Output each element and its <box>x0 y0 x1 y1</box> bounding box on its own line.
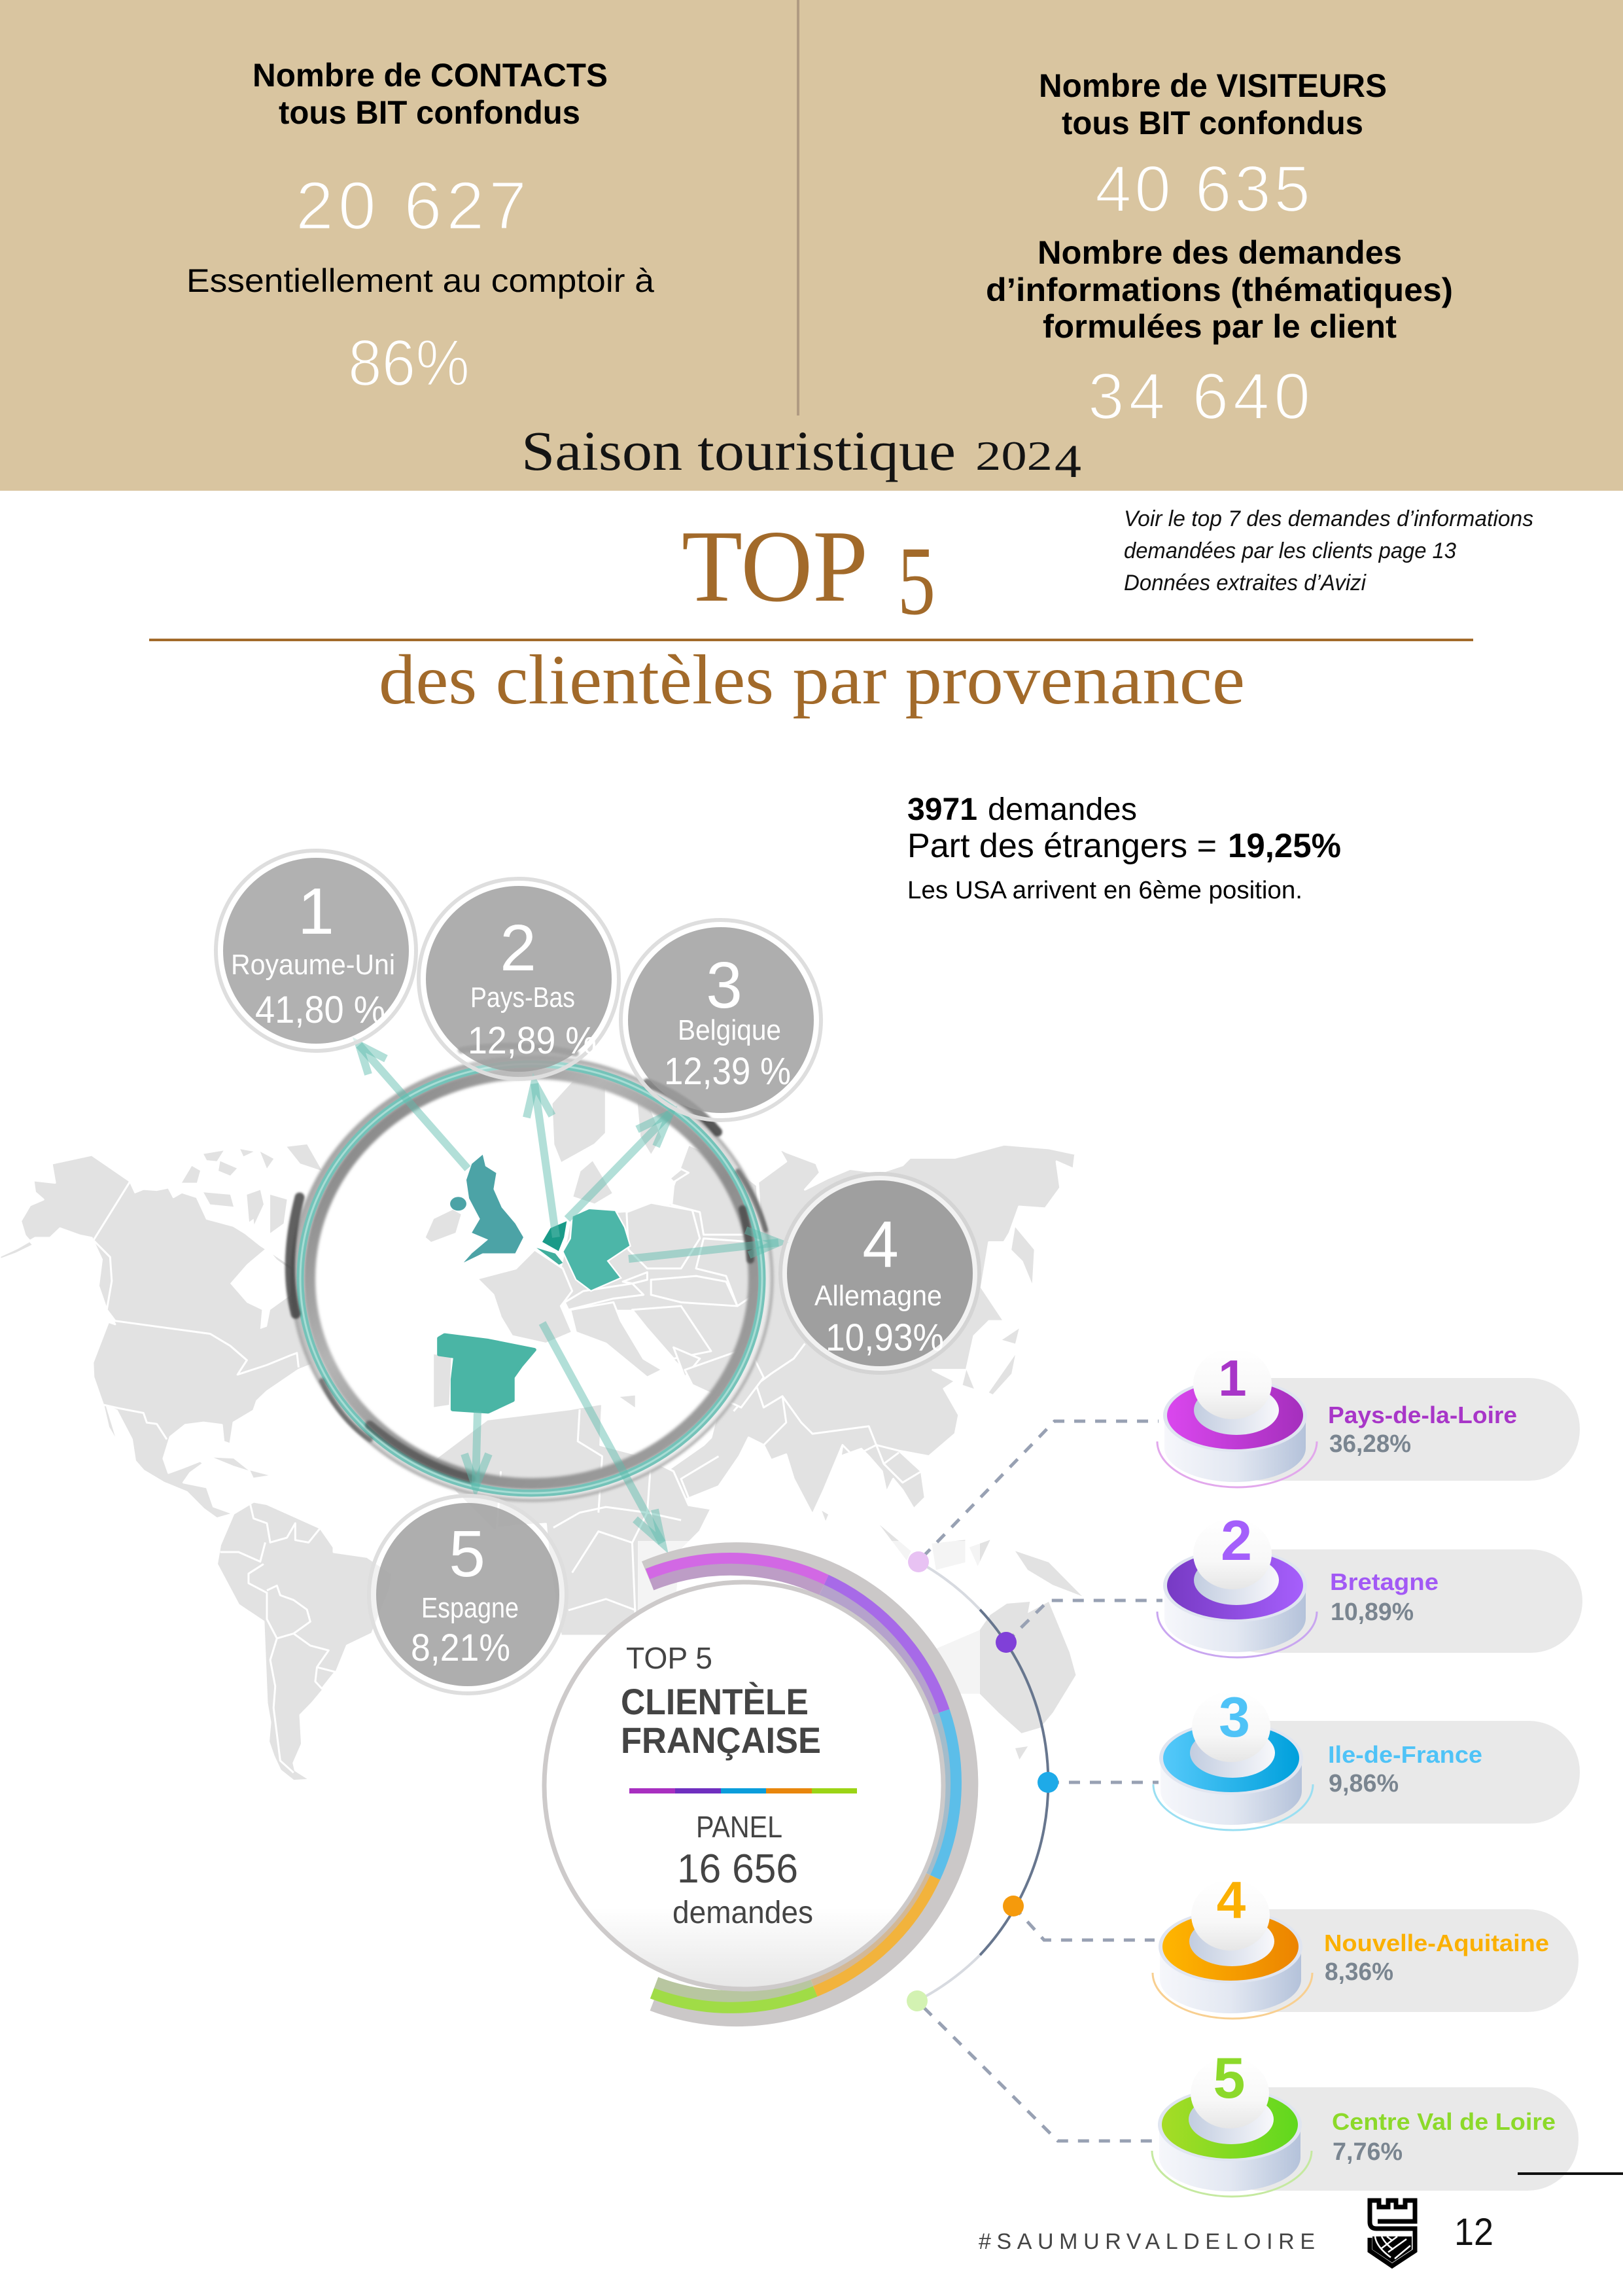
title: season: Saison touristique <box>521 419 956 482</box>
label: Bretagne <box>1330 1568 1439 1595</box>
value: 10,89% <box>1331 1598 1414 1626</box>
panel size <box>672 1810 813 1930</box>
title: top 5: TOP <box>682 509 868 623</box>
bubble 2: Pays-Bas <box>419 879 619 1079</box>
ring dark accents <box>290 1046 765 1479</box>
note: sources <box>1124 506 1533 595</box>
panel size: 16 656 <box>677 1846 798 1892</box>
heading: visitors: tous BIT confondus <box>1062 105 1363 141</box>
panel size: demandes <box>672 1896 813 1930</box>
arrow: Spain <box>464 1411 489 1487</box>
number: 3 <box>1219 1686 1250 1749</box>
pedestal <box>1152 2058 1312 2197</box>
panel: top 5 French clientele <box>544 1554 966 2015</box>
number: contacts: 20 627 <box>296 168 527 244</box>
hashtag: #SAUMURVALDELOIRE <box>979 2229 1315 2254</box>
number: 2 <box>1221 1510 1252 1572</box>
label: Centre Val de Loire <box>1332 2108 1556 2135</box>
coloured segments outer <box>648 1559 956 2007</box>
Europe <box>477 1077 763 1409</box>
label: Ile-de-France <box>1328 1741 1482 1768</box>
value: 7,76% <box>1333 2138 1403 2166</box>
title: season: 4 <box>1055 435 1081 487</box>
arrow: Germany <box>629 1230 778 1259</box>
bubble 2: Pays-Bas: Pays-Bas <box>470 981 575 1014</box>
timeline dots <box>907 1551 1058 2011</box>
dashed connectors <box>922 1421 1162 2141</box>
bubble 3: Belgique: 3 <box>706 949 742 1022</box>
text block: foreign share: 19,25% <box>1228 827 1341 865</box>
rank 5: Centre Val de Loire <box>1152 2045 1579 2197</box>
pill <box>1210 1549 1582 1653</box>
rank 2: Bretagne <box>1157 1510 1582 1657</box>
pedestal <box>1153 1691 1313 1830</box>
Spain <box>439 1335 534 1412</box>
arrow: Netherlands <box>527 1084 556 1237</box>
world map: Eurasia and Africa <box>428 1077 1075 1636</box>
panel heading: FRANÇAISE <box>621 1720 821 1761</box>
title rule <box>149 639 1473 641</box>
label: Pays-de-la-Loire <box>1328 1402 1517 1428</box>
icon: castle shield logo <box>1370 2200 1415 2266</box>
title: top 5: 5 <box>898 527 935 635</box>
text block: foreign share: Part des étrangers = <box>907 827 1217 865</box>
Netherlands <box>542 1221 567 1251</box>
arrow: France <box>542 1323 662 1543</box>
number: visitors: 40 635 <box>1095 152 1310 226</box>
bubble 1: Royaume-Uni: Royaume-Uni <box>231 949 395 981</box>
note: sources: Voir le top 7 des demandes d’informations <box>1124 506 1533 531</box>
pill <box>1210 1721 1580 1824</box>
title: season: 202 <box>975 433 1053 479</box>
text block: foreign share: 3971 <box>907 792 977 827</box>
arrow: United Kingdom <box>359 1045 468 1169</box>
text block: foreign share: Les USA arrivent en 6ème position. <box>907 877 1302 904</box>
panel: visitors and requests <box>986 67 1453 433</box>
heading: contacts: tous BIT confondus <box>279 94 580 131</box>
outer grey band <box>646 1554 966 2015</box>
number: requests: 34 640 <box>1088 360 1310 433</box>
United Kingdom <box>450 1155 523 1263</box>
top band background <box>0 0 1623 491</box>
heading: requests <box>986 234 1453 345</box>
note: sources: demandées par les clients page 13 <box>1124 539 1456 563</box>
value: 36,28% <box>1329 1430 1411 1458</box>
pedestal <box>1153 1880 1312 2019</box>
footer rule <box>1518 2172 1623 2175</box>
note: sources: Données extraites d’Avizi <box>1124 571 1367 595</box>
bubble 4: Allemagne: Allemagne <box>814 1280 942 1312</box>
value: 8,36% <box>1325 1958 1393 1986</box>
pill <box>1210 2087 1579 2191</box>
pill <box>1210 1909 1579 2012</box>
timeline arc <box>917 1562 1048 2001</box>
arrows: countries to bubbles <box>359 1045 778 1543</box>
colour bar <box>629 1788 857 1793</box>
heading: requests: d’informations (thématiques) <box>986 272 1453 308</box>
bubble 5: Espagne <box>369 1496 567 1693</box>
heading: visitors: Nombre de VISITEURS <box>1039 67 1387 104</box>
number: 1 <box>1218 1349 1247 1407</box>
value: 9,86% <box>1329 1770 1399 1797</box>
pedestal <box>1157 1349 1317 1487</box>
world map: Oceania <box>880 1525 1082 1759</box>
text: comptoir: Essentiellement au comptoir à <box>186 262 654 299</box>
Belgium <box>536 1248 563 1265</box>
bubble 4: Allemagne <box>780 1174 979 1373</box>
heading: visitors <box>1039 67 1387 141</box>
vertical divider <box>797 0 799 415</box>
label: Nouvelle-Aquitaine <box>1324 1930 1549 1956</box>
coloured segments inner <box>652 1570 945 1996</box>
rank 4: Nouvelle-Aquitaine <box>1153 1871 1579 2019</box>
arrow: Belgium <box>567 1114 670 1219</box>
white disc <box>544 1582 943 1989</box>
bubble 5: Espagne: Espagne <box>421 1592 519 1624</box>
number: 5 <box>1213 2045 1245 2110</box>
Asia <box>666 1144 1075 1528</box>
bubble 1: Royaume-Uni: 1 <box>298 875 334 948</box>
rank 1: Pays-de-la-Loire <box>1157 1349 1580 1487</box>
bubble 3: Belgique: Belgique <box>678 1014 781 1046</box>
bubble 2: Pays-Bas: 2 <box>500 911 536 985</box>
ring interior <box>306 1066 758 1491</box>
text block: foreign share <box>907 792 1341 904</box>
pill <box>1210 1378 1580 1481</box>
bubble 3: Belgique <box>621 920 821 1120</box>
number: comptoir share: 86% <box>348 327 470 400</box>
heading: contacts <box>253 57 608 131</box>
panel heading <box>621 1641 821 1761</box>
title: season <box>521 419 1081 487</box>
Africa <box>428 1404 711 1636</box>
panel: contacts <box>186 57 654 400</box>
white veil behind French panel <box>638 1541 980 2028</box>
bubble 5: Espagne: 8,21% <box>411 1627 510 1669</box>
heading: requests: formulées par le client <box>1043 308 1397 345</box>
panel heading: TOP 5 <box>626 1641 712 1675</box>
pedestal <box>1157 1519 1317 1657</box>
world map: Americas <box>0 1144 392 1781</box>
bubble 2: Pays-Bas: 12,89 % <box>468 1019 597 1062</box>
Ireland <box>426 1210 461 1242</box>
panel heading: CLIENTÈLE <box>621 1681 809 1722</box>
panel size: PANEL <box>696 1810 782 1844</box>
bubble 3: Belgique: 12,39 % <box>664 1050 791 1093</box>
teal countries inside ring <box>426 1155 631 1412</box>
bubble 1: Royaume-Uni: 41,80 % <box>255 989 385 1031</box>
bubble 5: Espagne: 5 <box>449 1517 485 1591</box>
heading: requests: Nombre des demandes <box>1038 234 1402 271</box>
subtitle: des clientèles par provenance <box>379 641 1245 719</box>
heading: contacts: Nombre de CONTACTS <box>253 57 608 94</box>
silver ring <box>290 1046 772 1500</box>
number: 4 <box>1217 1871 1246 1929</box>
rank 3: Ile-de-France <box>1153 1686 1580 1830</box>
page number: 12 <box>1454 2211 1493 2253</box>
bubble 1: Royaume-Uni <box>216 851 416 1051</box>
bubble 4: Allemagne: 4 <box>862 1208 899 1281</box>
title: top 5 <box>682 509 935 635</box>
text block: foreign share: demandes <box>988 792 1137 827</box>
Germany <box>563 1209 631 1291</box>
Portugal <box>434 1354 451 1407</box>
bubble 4: Allemagne: 10,93% <box>826 1316 944 1359</box>
